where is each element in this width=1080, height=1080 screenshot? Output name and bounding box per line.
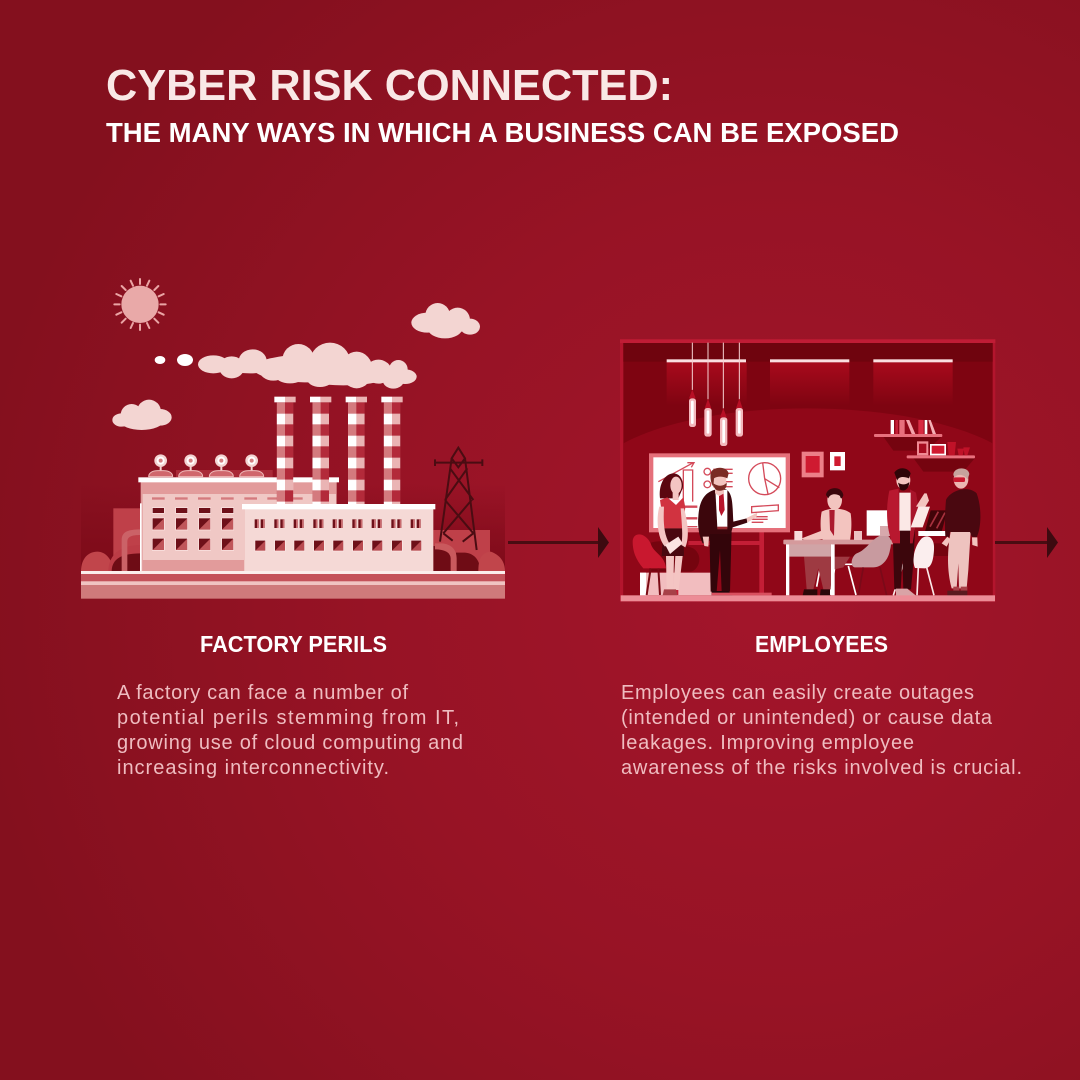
text: employees description: Employees can easily create outages: [621, 682, 974, 704]
floor: [621, 593, 995, 601]
text: employees description: leakages. Improving employee: [621, 732, 914, 754]
furniture left: [633, 534, 712, 595]
wall frames: [802, 452, 845, 477]
icon: sun: [114, 279, 166, 330]
heading: factory perils: FACTORY PERILS: [200, 631, 387, 657]
illustration: factory: [81, 279, 505, 599]
title: THE MANY WAYS IN WHICH A BUSINESS CAN BE EXPOSED: [106, 117, 899, 148]
ceiling lights: [667, 359, 953, 406]
person: bearded man: [887, 468, 930, 596]
title: CYBER RISK CONNECTED:: [106, 61, 673, 110]
pendant lamps: [689, 343, 743, 446]
title: [106, 61, 899, 148]
person: presenter: [698, 468, 757, 596]
illustration: office: [620, 339, 995, 602]
building: rear: [138, 454, 339, 572]
building: front: [242, 504, 435, 572]
text: factory description: potential perils stemming from IT,: [117, 707, 459, 729]
arrow 2: [995, 527, 1058, 558]
haze: [81, 483, 505, 572]
person: man with glasses: [942, 468, 980, 596]
frame and room: [620, 339, 995, 602]
icon: smoke: [155, 343, 417, 389]
chimneys: [274, 397, 403, 504]
text: employees description: (intended or unintended) or cause data: [621, 707, 993, 729]
background buildings and bushes: [81, 508, 505, 572]
text: factory description: A factory can face a number of: [117, 682, 408, 704]
icon: left cloud: [112, 400, 172, 430]
text: factory description: [117, 682, 463, 779]
ground: [81, 571, 505, 599]
text: employees description: awareness of the risks involved is crucial.: [621, 757, 1022, 779]
person: woman: [658, 473, 688, 595]
icon: pylon: [435, 448, 482, 550]
white chair behind desk: [817, 564, 856, 595]
text: employees description: [621, 682, 1022, 779]
grey chair: [852, 535, 891, 595]
computers: [867, 510, 949, 595]
roof vents: [149, 454, 264, 477]
arrow 1: [508, 527, 609, 558]
icon: right cloud: [411, 303, 480, 338]
text: factory description: increasing interconnectivity.: [117, 757, 389, 779]
desk and seated man: [783, 488, 893, 595]
window rows: [152, 497, 303, 500]
heading: employees: EMPLOYEES: [755, 631, 888, 657]
whiteboard: [649, 453, 790, 595]
shelves: [874, 420, 975, 472]
text: factory description: growing use of cloud computing and: [117, 732, 463, 754]
